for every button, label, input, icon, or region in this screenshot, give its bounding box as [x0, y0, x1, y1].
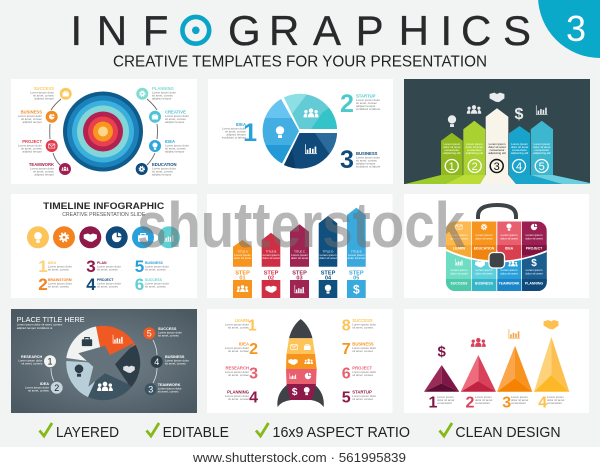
right list: 7 — [342, 341, 351, 358]
node labels: sit amet, consec — [21, 362, 43, 366]
arrow text: dolor sit amet — [488, 145, 506, 149]
item 3: adipisci tempor — [356, 162, 375, 166]
right labels: Lorem ipsum dolor — [165, 144, 189, 148]
step labels — [235, 270, 364, 282]
left list: Lorem ipsum dolor — [225, 394, 249, 398]
briefcase text: dolor sit amet — [450, 272, 468, 276]
pyramid 4 — [534, 337, 569, 392]
arrow text: consectetur — [444, 148, 459, 152]
right labels: sit amet, consec — [165, 117, 186, 121]
arrow text: Lorem ipsum — [466, 142, 483, 146]
briefcase text: IDEA — [505, 246, 514, 250]
panel: timeline — [11, 194, 197, 298]
arrow text: adipiscing elit — [488, 151, 506, 155]
step labels: STEP — [235, 270, 250, 276]
briefcase text: Lorem ipsum — [526, 268, 543, 272]
numbered rings — [445, 160, 548, 173]
panel: dark arrows — [404, 79, 590, 184]
arrow text: adipiscing elit — [511, 151, 528, 155]
numbered nodes: 1 — [47, 356, 53, 366]
briefcase text: Lorem ipsum — [476, 233, 493, 237]
node labels: sit amet, consec — [158, 334, 179, 338]
right list: Lorem ipsum dolor — [352, 346, 376, 350]
left list: 4 — [249, 390, 258, 406]
pyramid captions: consectetur — [437, 401, 452, 405]
item 3: Lorem ipsum dolor — [356, 156, 380, 160]
panel: dark star pie — [11, 309, 197, 413]
left labels: Lorem ipsum dolor — [30, 166, 54, 170]
timeline list: 4 — [86, 275, 96, 294]
item 2: Lorem ipsum dolor — [356, 98, 380, 102]
briefcase text: BUSINESS — [475, 282, 494, 286]
left labels: sit amet, consec — [21, 117, 43, 121]
left labels: Lorem ipsum dolor — [30, 90, 54, 94]
briefcase text: Lorem ipsum — [476, 268, 493, 272]
left list: LEARN — [235, 318, 249, 323]
arrow text — [443, 142, 551, 155]
node labels: sit amet, consec — [28, 388, 50, 392]
panel: rocket — [207, 309, 392, 413]
rocket icons: $ — [292, 387, 298, 398]
left list: Lorem ipsum dolor — [225, 370, 249, 374]
arrow titles — [234, 250, 365, 260]
left labels: adipisci tempor — [35, 96, 54, 100]
pyramid captions: consectetur — [511, 401, 526, 405]
briefcase text: Lorem ipsum — [526, 233, 543, 237]
left list: sit amet, consec — [228, 373, 250, 377]
timeline list: 6 — [135, 275, 144, 294]
panel: pyramids — [404, 309, 589, 413]
numbered nodes — [44, 327, 163, 395]
pyramid 3 — [497, 346, 532, 392]
item 3 — [340, 146, 381, 174]
left labels: adipisci tempor — [23, 150, 42, 154]
node labels: Lorem ipsum dolor — [25, 386, 49, 390]
right labels: adipisci tempor — [165, 150, 184, 154]
right list: 8 — [342, 318, 351, 334]
briefcase text: dolor sit amet — [500, 236, 518, 240]
briefcase text: EDUCATION — [474, 246, 495, 250]
timeline list: 1 — [38, 257, 48, 276]
step labels: 01 — [239, 276, 246, 282]
node labels: Lorem ipsum dolor — [165, 358, 189, 362]
timeline heading: TIMELINE INFOGRAPHIC — [43, 201, 164, 212]
arrow text: consectetur — [490, 148, 505, 152]
pyramid captions: Lorem ipsum — [511, 395, 528, 399]
left list: IDEA — [239, 342, 249, 346]
numbered rings: 1 — [449, 161, 455, 173]
timeline list: 2 — [38, 275, 48, 294]
item 2: adipisci tempor — [356, 104, 375, 108]
pie sector 2 — [284, 94, 337, 129]
arrow text: Lorem ipsum — [511, 142, 528, 146]
connector arcs — [51, 340, 157, 383]
dark panel description: Lorem ipsum dolor sit amet, consec — [17, 322, 63, 326]
right list: sit amet, consec — [352, 349, 374, 353]
briefcase body — [446, 221, 547, 292]
node labels: SUCCESS — [158, 327, 177, 331]
arrow text: adipiscing elit — [533, 151, 551, 155]
item 2: sit amet, consec — [356, 101, 377, 105]
right labels: CREATIVE — [165, 110, 186, 114]
pyramid captions — [429, 394, 565, 412]
title: INF GRAPHICS — [0, 7, 531, 54]
left labels: BUSINESS — [21, 110, 42, 114]
dark panel description: adipisci tempor incididunt ut — [17, 326, 53, 330]
node labels: BUSINESS — [165, 355, 185, 359]
item 1 — [222, 119, 257, 147]
pyramid captions: dolor sit amet — [437, 398, 455, 402]
node labels: Lorem ipsum dolor — [158, 386, 182, 390]
feature: layered: LAYERED — [56, 424, 119, 441]
node labels: sit amet, consec — [165, 362, 186, 366]
timeline list: Lorem ipsum dolor — [145, 264, 169, 268]
timeline list: PROJECT — [97, 278, 114, 282]
star pie wedges — [66, 326, 140, 400]
item 3: BUSINESS — [356, 151, 378, 156]
item 1: IDEA — [236, 122, 246, 127]
briefcase text: LEARN — [453, 246, 465, 250]
left labels: adipisci tempor — [23, 120, 42, 124]
step labels: STEP — [349, 270, 364, 276]
step labels: 03 — [296, 276, 303, 282]
icon squares — [233, 280, 366, 298]
item 1: sit amet, consec — [225, 130, 247, 134]
item 2: 2 — [340, 90, 354, 118]
rocket fins — [277, 384, 324, 407]
right labels: Lorem ipsum dolor — [152, 90, 176, 94]
pyramid captions: 4 — [538, 394, 547, 412]
left labels: sit amet, consec — [33, 94, 55, 98]
left labels: sit amet, consec — [21, 146, 43, 150]
node labels — [18, 327, 189, 394]
briefcase text: dolor sit amet — [450, 236, 468, 240]
numbered nodes: 3 — [148, 384, 153, 394]
timeline list: IDEA — [48, 261, 57, 265]
right list: STARTUP — [352, 390, 372, 394]
briefcase icons: $ — [531, 258, 537, 269]
briefcase text: dolor sit amet — [525, 236, 543, 240]
briefcase text: dolor sit amet — [475, 272, 493, 276]
star pie icons — [75, 335, 135, 391]
right labels: sit amet, consec — [165, 146, 186, 150]
step labels: STEP — [292, 270, 307, 276]
item 1: 1 — [243, 119, 257, 147]
left list: 1 — [248, 318, 257, 334]
numbered rings: 2 — [472, 161, 478, 173]
feature: editable: EDITABLE — [163, 424, 229, 441]
left list: Lorem ipsum dolor — [225, 322, 249, 326]
feature checklist — [40, 423, 561, 441]
pyramid captions: dolor sit amet — [547, 398, 565, 402]
arrow titles: dolor sit amet — [319, 256, 337, 260]
arrow titles: TITLE E — [351, 250, 362, 254]
arrow titles: TITLE B — [266, 250, 276, 254]
pyramid captions: 1 — [429, 394, 438, 412]
arrow text: adipiscing elit — [466, 151, 483, 155]
item 1: Lorem ipsum dolor — [222, 126, 246, 130]
left list: 2 — [249, 341, 258, 358]
right list: BUSINESS — [352, 342, 374, 346]
item 1: adipisci tempor — [227, 132, 246, 136]
briefcase text: Lorem ipsum — [501, 268, 518, 272]
right list: sit amet, consec — [352, 397, 374, 401]
item 3: incididunt ut labore — [356, 164, 381, 168]
left labels: sit amet, consec — [33, 170, 55, 174]
pyramid 2 — [461, 355, 496, 392]
arrow titles: dolor sit amet — [291, 256, 308, 260]
left labels: Lorem ipsum dolor — [18, 114, 42, 118]
arrow text: Lorem ipsum — [533, 142, 551, 146]
node labels: IDEA — [40, 382, 49, 386]
timeline list: Lorem ipsum dolor — [48, 282, 72, 286]
arrow text: consectetur — [467, 148, 482, 152]
arrow titles: Lorem ipsum — [291, 253, 308, 257]
icon squares: $ — [353, 282, 360, 296]
briefcase text: dolor sit amet — [525, 272, 543, 276]
arrow titles: dolor sit amet — [262, 256, 280, 260]
right list: sit amet, consec — [352, 326, 374, 330]
item 1: incididunt ut labore — [222, 136, 246, 140]
timeline list: Lorem ipsum dolor — [48, 264, 72, 268]
left labels: adipisci tempor — [35, 172, 54, 176]
step labels: STEP — [264, 270, 279, 276]
timeline list: sit amet, consec — [97, 268, 118, 272]
numbered nodes: 2 — [54, 383, 59, 393]
floor perspective bands — [405, 175, 590, 184]
arrow text: adipiscing elit — [443, 151, 461, 155]
left list: 3 — [249, 366, 258, 382]
left list: RESEARCH — [226, 366, 249, 370]
right labels: sit amet, consec — [152, 94, 173, 98]
panel: briefcase — [404, 194, 589, 298]
pyramid captions: consectetur — [475, 401, 490, 405]
pyramid icons — [438, 320, 558, 360]
timeline list: 5 — [135, 257, 144, 276]
numbered nodes: 5 — [147, 328, 152, 338]
right list: Lorem ipsum dolor — [352, 370, 376, 374]
stock footer: www.shutterstock.com · 561995839 — [192, 450, 406, 465]
briefcase handle — [478, 205, 516, 219]
step labels: 04 — [325, 276, 332, 282]
numbered rings: 5 — [539, 161, 545, 173]
watermark: shutterstock — [137, 189, 465, 261]
pyramid 1 — [424, 365, 459, 392]
dark panel description — [17, 322, 63, 330]
step labels: 02 — [268, 276, 274, 282]
arrow titles: Lorem ipsum — [348, 253, 365, 257]
timeline list: PLAN — [97, 261, 107, 265]
node labels: RESEARCH — [21, 355, 43, 359]
node circles and icons — [46, 88, 161, 175]
arrows — [233, 208, 366, 267]
left list: sit amet, consec — [228, 349, 250, 353]
briefcase icons — [455, 223, 537, 269]
right labels: EDUCATION — [152, 162, 177, 167]
left list: sit amet, consec — [228, 326, 250, 330]
corner badge: number 3 — [538, 0, 600, 58]
briefcase text: TEAMWORK — [498, 282, 520, 286]
icons above arrows — [448, 93, 547, 127]
right labels: sit amet, consec — [152, 170, 173, 174]
pyramid captions: consectetur — [547, 401, 562, 405]
panel: step arrows — [207, 194, 392, 298]
briefcase clasp — [489, 252, 504, 268]
pie sector 1 — [262, 99, 299, 164]
right labels: Lorem ipsum dolor — [165, 114, 189, 118]
left list: sit amet, consec — [228, 397, 250, 401]
timeline list: Lorem ipsum dolor — [97, 264, 121, 268]
briefcase text: Lorem ipsum — [501, 233, 518, 237]
arrow titles: TITLE A — [237, 250, 248, 254]
pyramid captions: Lorem ipsum — [475, 395, 492, 399]
arrow titles: dolor sit amet — [348, 256, 365, 260]
timeline subheading: CREATIVE PRESENTATION SLIDE — [62, 212, 146, 218]
pyramid captions: Lorem ipsum — [547, 395, 564, 399]
right labels: adipisci tempor — [152, 96, 171, 100]
right list: Lorem ipsum dolor — [352, 322, 376, 326]
pyramid icons: $ — [438, 344, 447, 360]
briefcase text: PLANNING — [525, 282, 543, 286]
corner badge: number 3: 3 — [566, 8, 586, 49]
right list: SUCCESS — [352, 318, 373, 323]
numbered rings: 4 — [516, 161, 522, 173]
right list: Lorem ipsum dolor — [352, 394, 376, 398]
briefcase text: Lorem ipsum — [451, 268, 468, 272]
arrow text: dolor sit amet — [511, 145, 528, 149]
item 2: incididunt ut labore — [356, 107, 381, 111]
dark panel heading: PLACE TITLE HERE — [17, 315, 85, 324]
numbered nodes: 4 — [154, 357, 159, 367]
arrow text: Lorem ipsum — [489, 142, 506, 146]
briefcase text — [450, 233, 543, 286]
timeline list: sit amet, consec — [97, 284, 118, 288]
right list: 5 — [342, 390, 351, 406]
timeline list: sit amet, consec — [48, 284, 69, 288]
arrow titles: Lorem ipsum — [320, 253, 337, 257]
right list — [342, 318, 376, 406]
arrow text: dolor sit amet — [466, 145, 483, 149]
timeline list: sit amet, consec — [145, 284, 166, 288]
feature: clean design: CLEAN DESIGN — [455, 424, 561, 441]
briefcase text: dolor sit amet — [500, 272, 518, 276]
step labels: 05 — [353, 276, 359, 282]
arrow titles: Lorem ipsum — [234, 253, 251, 257]
feature: aspect ratio: 16x9 ASPECT RATIO — [272, 424, 410, 441]
left list — [225, 318, 258, 406]
timeline circles — [27, 226, 180, 248]
briefcase text: SUCCESS — [451, 282, 468, 286]
timeline list: BUSINESS — [145, 261, 164, 265]
node labels: TEAMWORK — [158, 383, 181, 387]
node labels: Lorem ipsum dolor — [158, 330, 182, 334]
item 3: sit amet, consec — [356, 158, 377, 162]
arrow text: dolor sit amet — [443, 145, 461, 149]
pyramid captions: Lorem ipsum — [437, 395, 454, 399]
title: O — [179, 7, 212, 54]
rocket nose — [289, 319, 312, 338]
briefcase text: dolor sit amet — [475, 236, 493, 240]
numbered rings: 3 — [494, 161, 500, 173]
timeline list: sit amet, consec — [48, 268, 69, 272]
timeline list: BRAINSTORM — [48, 278, 72, 282]
left labels: SUCCESS — [34, 86, 54, 91]
arrow text: dolor sit amet — [533, 145, 551, 149]
left labels — [18, 86, 55, 176]
left labels: PROJECT — [22, 139, 42, 144]
arrow titles: Lorem ipsum — [263, 253, 280, 257]
pie sector 3 — [284, 133, 337, 169]
briefcase text: Lorem ipsum — [451, 233, 468, 237]
right labels: IDEA — [165, 139, 175, 144]
briefcase text: PROJECT — [526, 246, 543, 250]
item 2 — [340, 90, 381, 118]
arrows — [441, 108, 553, 175]
right labels: Lorem ipsum dolor — [152, 166, 176, 170]
concentric circles — [63, 92, 143, 172]
arrow titles: TITLE D — [323, 250, 333, 254]
node labels: Lorem ipsum dolor — [18, 358, 42, 362]
icons above arrows: $ — [515, 106, 524, 123]
right labels: adipisci tempor — [165, 120, 184, 124]
timeline list: sit amet, consec — [145, 268, 166, 272]
right list: 6 — [342, 366, 351, 382]
subtitle: CREATIVE TEMPLATES FOR YOUR PRESENTATION — [113, 54, 487, 70]
arrow text: consectetur — [512, 148, 527, 152]
step labels: STEP — [321, 270, 336, 276]
right list: PROJECT — [352, 366, 373, 370]
right labels — [152, 86, 189, 176]
pyramid captions: 2 — [466, 394, 475, 412]
right labels: adipisci tempor — [152, 172, 171, 176]
left labels: TEAMWORK — [29, 162, 54, 167]
connector arcs — [50, 99, 158, 165]
arrow text: consectetur — [534, 148, 549, 152]
node labels: sit amet, consec — [158, 390, 179, 394]
item 3: 3 — [340, 146, 354, 174]
rocket icons — [288, 344, 313, 398]
pyramid captions: 3 — [502, 394, 511, 412]
timeline list: SUCCESS — [145, 278, 163, 282]
item 2: STARTUP — [356, 94, 376, 98]
left list: PLANNING — [227, 390, 249, 394]
timeline list — [38, 257, 169, 294]
pie icons — [276, 108, 319, 154]
right labels: PLANNING — [152, 86, 174, 91]
panel: three-part pie — [208, 79, 393, 184]
panel: concentric target — [11, 79, 197, 184]
arrow titles: TITLE C — [294, 250, 305, 254]
pyramid captions: dolor sit amet — [511, 398, 529, 402]
left list: Lorem ipsum dolor — [225, 346, 249, 350]
arrow titles: dolor sit amet — [234, 256, 251, 260]
left labels: Lorem ipsum dolor — [18, 144, 42, 148]
timeline list: 3 — [86, 257, 96, 276]
pyramid captions: dolor sit amet — [475, 398, 493, 402]
arrow text: Lorem ipsum — [443, 142, 461, 146]
timeline list: Lorem ipsum dolor — [97, 282, 121, 286]
right list: sit amet, consec — [352, 373, 374, 377]
rocket body — [286, 338, 317, 400]
timeline list: Lorem ipsum dolor — [145, 282, 169, 286]
